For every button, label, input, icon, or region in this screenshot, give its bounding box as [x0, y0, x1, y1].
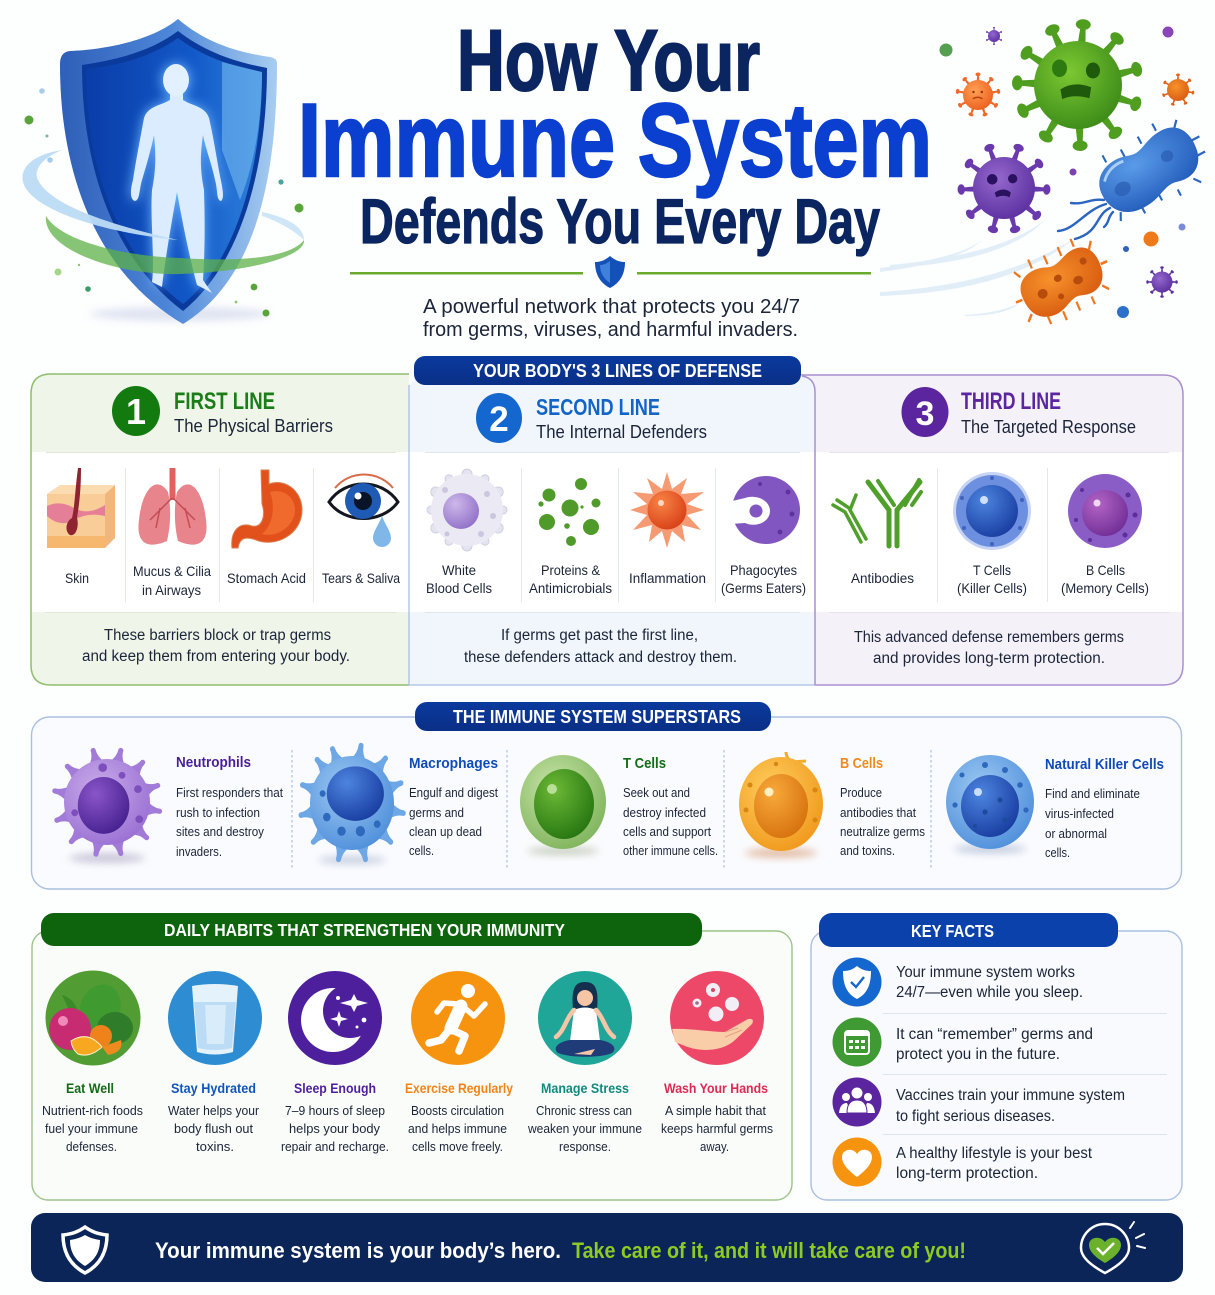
text: exercise regularly: cells move freely.	[412, 1139, 503, 1154]
banner: key facts: KEY FACTS	[911, 921, 994, 941]
title divider with shield	[350, 256, 871, 288]
text: macrophages: cells.	[409, 843, 434, 858]
germs illustration	[880, 19, 1215, 336]
fact 1	[832, 958, 1083, 1006]
text: fact 2: It can “remember” germs and	[896, 1026, 1093, 1043]
banner: lines of defense	[414, 356, 801, 385]
number badge 3	[902, 387, 948, 437]
number badge 2: 2	[489, 400, 509, 439]
banner: superstars	[415, 702, 771, 731]
text: exercise regularly: and helps immune	[408, 1121, 507, 1136]
description: These barriers block or trap germs	[104, 627, 331, 644]
text: T cells: cells and support	[623, 824, 711, 839]
labels: (Germs Eaters)	[721, 580, 806, 596]
text: stay hydrated: Water helps your	[168, 1103, 260, 1118]
text: neutrophils	[176, 754, 283, 859]
icon: heart check badge	[1081, 1222, 1145, 1273]
green virus	[1012, 19, 1144, 151]
text: eat well: fuel your immune	[45, 1121, 138, 1136]
description: If germs get past the first line,	[501, 627, 698, 644]
text: B cells: and toxins.	[840, 843, 895, 858]
icon: hand with bubbles	[670, 971, 764, 1065]
text: exercise regularly	[405, 1080, 513, 1154]
icon: phagocyte	[728, 476, 800, 544]
cell: B cells	[739, 752, 823, 858]
text: natural killer: or abnormal	[1045, 826, 1107, 841]
motion swooshes	[880, 220, 1075, 316]
text: exercise regularly: Boosts circulation	[411, 1103, 504, 1118]
text: sleep enough	[281, 1080, 389, 1154]
icon: calendar	[832, 1018, 882, 1066]
labels: Skin	[65, 570, 89, 586]
heading: third line: THIRD LINE	[961, 388, 1061, 415]
labels: Stomach Acid	[227, 570, 306, 586]
labels: Antimicrobials	[529, 580, 612, 596]
fact 4	[832, 1138, 1093, 1186]
heading: second line	[536, 394, 707, 442]
footer message: Your immune system is your body’s hero.	[155, 1238, 561, 1263]
heading: first line: FIRST LINE	[174, 388, 275, 415]
banner: lines of defense: YOUR BODY'S 3 LINES OF DEFENSE	[473, 361, 762, 381]
panel: first line	[31, 374, 409, 685]
banner: superstars: THE IMMUNE SYSTEM SUPERSTARS	[453, 707, 741, 727]
particles	[24, 88, 304, 316]
description: these defenders attack and destroy them.	[464, 649, 737, 666]
description	[464, 627, 737, 666]
icon: heart	[832, 1138, 882, 1186]
icon: glass of water	[168, 971, 262, 1065]
text: stay hydrated: toxins.	[196, 1139, 234, 1154]
labels	[851, 562, 1149, 596]
habit: eat well	[42, 970, 143, 1154]
text: T cells: destroy infected	[623, 805, 706, 820]
icon: stomach	[232, 470, 302, 548]
panel: third line	[800, 375, 1183, 685]
number badge 2	[476, 393, 522, 443]
text: fact 4	[896, 1145, 1093, 1182]
text: manage stress: Chronic stress can	[536, 1103, 632, 1118]
fact 3	[832, 1078, 1125, 1126]
text: B cells: neutralize germs	[840, 824, 925, 839]
purple virus	[957, 143, 1051, 234]
text: stay hydrated: Stay Hydrated	[171, 1080, 256, 1096]
text: exercise regularly: Exercise Regularly	[405, 1080, 513, 1096]
labels: Mucus & Cilia	[133, 563, 211, 579]
subtitle	[423, 296, 800, 341]
orange bacterium	[1001, 229, 1122, 336]
panel: second line	[409, 375, 815, 685]
heading: third line	[961, 388, 1136, 437]
text: eat well: Nutrient-rich foods	[42, 1103, 143, 1118]
text: neutrophils: Neutrophils	[176, 754, 251, 771]
heading: first line	[174, 388, 333, 436]
labels: Tears & Saliva	[322, 570, 400, 586]
text: eat well	[42, 1080, 143, 1154]
icon: antibodies	[833, 480, 921, 546]
icon: shield check	[832, 958, 882, 1006]
text: fact 4: A healthy lifestyle is your best	[896, 1145, 1093, 1162]
icon: meditation	[538, 971, 632, 1065]
labels: Antibodies	[851, 570, 914, 586]
text: sleep enough: repair and recharge.	[281, 1139, 389, 1154]
text: T cells: Seek out and	[623, 785, 690, 800]
section: three lines of defense	[31, 356, 1183, 685]
panel: key facts	[811, 913, 1182, 1200]
text: natural killer: Natural Killer Cells	[1045, 756, 1164, 773]
text: neutrophils: rush to infection	[176, 805, 260, 820]
floating particles	[940, 26, 1186, 318]
text: macrophages: clean up dead	[409, 824, 482, 839]
text: stay hydrated	[168, 1080, 260, 1154]
text: macrophages: Macrophages	[409, 755, 498, 772]
banner: daily habits	[41, 913, 702, 946]
description	[854, 629, 1124, 667]
text: neutrophils: invaders.	[176, 844, 222, 859]
labels: White	[442, 562, 476, 578]
labels: Phagocytes	[730, 562, 797, 578]
text: fact 2	[896, 1026, 1093, 1063]
text: B cells: Produce	[840, 785, 882, 800]
text: T cells: T Cells	[623, 755, 666, 772]
description: This advanced defense remembers germs	[854, 629, 1124, 646]
text: macrophages: Engulf and digest	[409, 785, 498, 800]
text: wash your hands: A simple habit that	[665, 1103, 766, 1118]
text: natural killer: Find and eliminate	[1045, 786, 1140, 801]
habit: stay hydrated	[168, 971, 262, 1154]
heading: first line: The Physical Barriers	[174, 416, 333, 436]
text: T cells: other immune cells.	[623, 843, 718, 858]
heading: third line: The Targeted Response	[961, 417, 1136, 437]
icon: skin	[47, 468, 115, 548]
labels: Blood Cells	[426, 580, 492, 596]
icon: proteins	[538, 478, 600, 546]
swirl rings	[23, 150, 304, 274]
fact 2	[832, 1018, 1093, 1066]
icon: white blood cell	[427, 469, 507, 551]
title	[298, 13, 932, 257]
text: B cells: B Cells	[840, 755, 883, 772]
labels: (Killer Cells)	[957, 580, 1027, 596]
text: T cells	[623, 755, 718, 858]
text: fact 1	[896, 964, 1083, 1001]
text: wash your hands: away.	[700, 1139, 729, 1154]
heading: second line: The Internal Defenders	[536, 422, 707, 442]
description: and provides long-term protection.	[873, 650, 1105, 667]
text: wash your hands	[661, 1080, 773, 1154]
footer message	[155, 1238, 966, 1263]
text: macrophages: germs and	[409, 805, 464, 820]
text: manage stress	[527, 1080, 642, 1154]
text: wash your hands: keeps harmful germs	[661, 1121, 773, 1136]
footer banner	[31, 1213, 1183, 1282]
description	[82, 627, 350, 665]
text: natural killer	[1045, 756, 1164, 860]
text: fact 3: to fight serious diseases.	[896, 1108, 1055, 1125]
icon: B cell	[1068, 474, 1142, 548]
text: wash your hands: Wash Your Hands	[664, 1080, 768, 1096]
labels: Proteins &	[541, 562, 601, 578]
text: fact 1: 24/7—even while you sleep.	[896, 984, 1083, 1001]
text: sleep enough: Sleep Enough	[294, 1080, 376, 1096]
number badge 1	[112, 386, 160, 436]
number badge 1: 1	[126, 391, 146, 432]
hero illustration: shield with body	[23, 19, 304, 324]
cell: T cells	[520, 755, 606, 855]
text: fact 1: Your immune system works	[896, 964, 1075, 981]
labels: B Cells	[1086, 562, 1125, 578]
icon: fruit and vegetables	[46, 970, 140, 1066]
panel: daily habits	[32, 913, 792, 1200]
habit: wash your hands	[661, 971, 773, 1154]
heading: second line: SECOND LINE	[536, 394, 660, 420]
panel: immune system superstars	[32, 702, 1182, 889]
text: eat well: Eat Well	[66, 1080, 114, 1096]
labels: (Memory Cells)	[1061, 580, 1149, 596]
icon: moon and stars	[288, 971, 382, 1065]
cell: macrophages	[297, 741, 407, 864]
banner: key facts	[819, 913, 1118, 947]
text: manage stress: response.	[559, 1139, 611, 1154]
glowing body figure	[131, 64, 223, 293]
text: stay hydrated: body flush out	[174, 1121, 253, 1136]
text: neutrophils: sites and destroy	[176, 824, 264, 839]
text: macrophages	[409, 755, 498, 858]
icon: runner	[411, 971, 505, 1065]
subtitle: from germs, viruses, and harmful invaders.	[423, 319, 798, 341]
cell: natural killer	[946, 755, 1034, 854]
footer message: Take care of it, and it will take care of you!	[572, 1238, 966, 1263]
labels: Inflammation	[629, 570, 706, 586]
banner: daily habits: DAILY HABITS THAT STRENGTHEN YOUR IMMUNITY	[164, 920, 565, 940]
text: B cells	[840, 755, 925, 858]
blue bacterium	[1058, 107, 1215, 239]
small purple germs	[986, 27, 1178, 298]
text: fact 4: long-term protection.	[896, 1165, 1038, 1182]
subtitle: A powerful network that protects you 24/7	[423, 296, 800, 318]
small orange virus	[955, 72, 1001, 117]
title: Immune System	[298, 83, 932, 199]
labels	[426, 562, 806, 596]
cell: neutrophils	[51, 746, 164, 863]
icon: eye with tear	[329, 474, 398, 547]
habit: exercise regularly	[405, 971, 513, 1154]
text: neutrophils: First responders that	[176, 785, 283, 800]
icon: footer shield	[63, 1227, 107, 1273]
icon: T cell	[953, 472, 1031, 550]
text: sleep enough: 7–9 hours of sleep	[285, 1103, 385, 1118]
icon: lungs	[138, 468, 207, 545]
labels: in Airways	[142, 582, 201, 598]
icon: people	[832, 1078, 882, 1126]
text: eat well: defenses.	[66, 1139, 117, 1154]
number badge 3: 3	[916, 395, 934, 433]
title: Defends You Every Day	[360, 187, 880, 257]
text: sleep enough: helps your body	[289, 1121, 380, 1136]
small orange germ	[1162, 74, 1195, 106]
text: B cells: antibodies that	[840, 805, 916, 820]
text: fact 2: protect you in the future.	[896, 1046, 1060, 1063]
text: manage stress: weaken your immune	[527, 1121, 642, 1136]
text: natural killer: virus-infected	[1045, 806, 1114, 821]
icon: inflammation	[630, 472, 704, 548]
labels	[65, 563, 400, 598]
labels: T Cells	[973, 562, 1011, 578]
text: natural killer: cells.	[1045, 845, 1070, 860]
habit: sleep enough	[281, 971, 389, 1154]
title: How Your	[457, 13, 760, 109]
habit: manage stress	[527, 971, 642, 1154]
description: and keep them from entering your body.	[82, 648, 350, 665]
text: fact 3	[896, 1087, 1125, 1125]
text: manage stress: Manage Stress	[541, 1080, 629, 1096]
text: fact 3: Vaccines train your immune system	[896, 1087, 1125, 1104]
